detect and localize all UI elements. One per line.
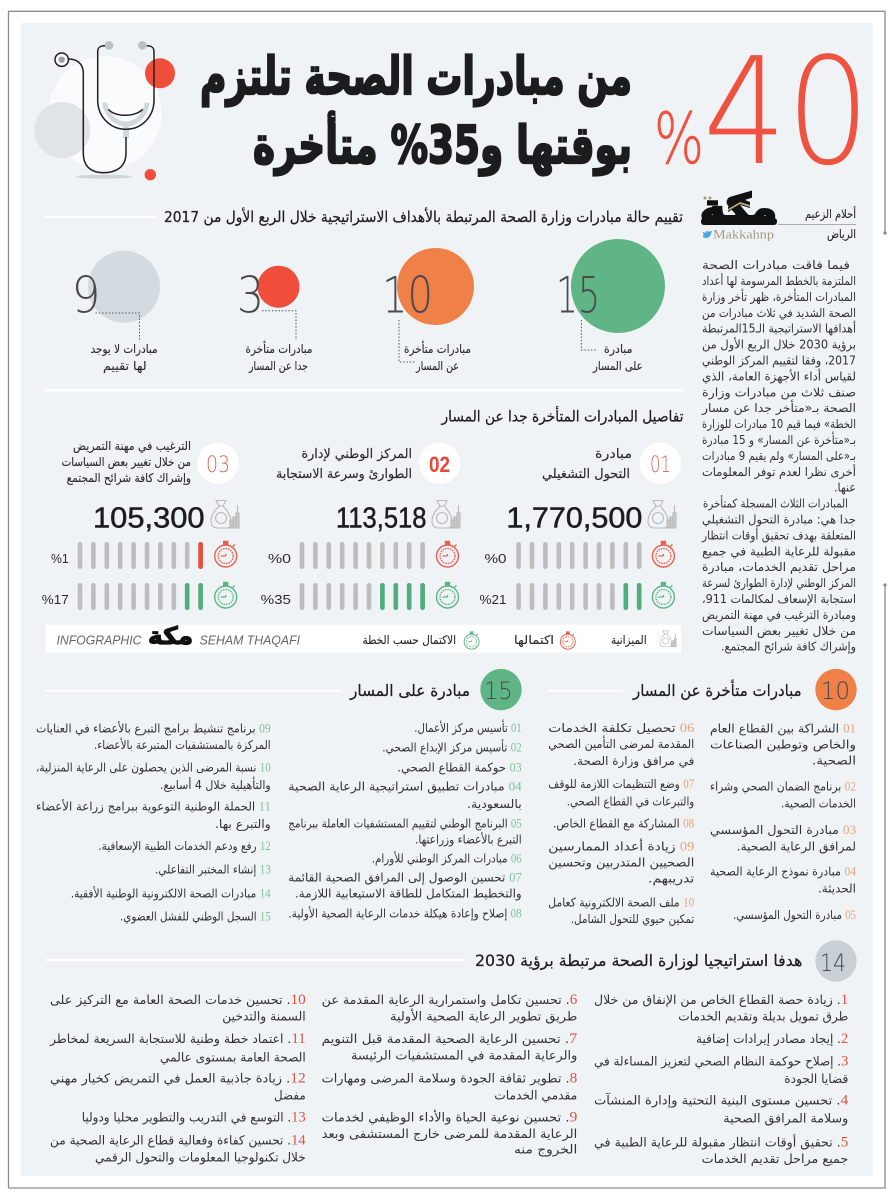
list: on track column 1: 08 إصلاح وإعادة هيكلة خدمات الرعاية الصحية الأولية. xyxy=(288,905,522,921)
initiative 02: 113,518 xyxy=(336,503,426,535)
legend strip xyxy=(46,622,681,653)
section: 14 strategic goals heading: 14 xyxy=(820,949,846,977)
list: on track column 1: 03 حوكمة القطاع الصحي. xyxy=(397,760,522,775)
list: on track column 2: 10 نسبة المرضى الذين يحصلون على الرعاية المنزلية، xyxy=(36,760,271,775)
list: behind schedule column 1: 05 مبادرة التحول المؤسسي. xyxy=(733,908,856,923)
goals column 2: 7. تحسين الرعاية الصحية المقدمة قبل التنويم xyxy=(322,1031,578,1047)
section: 15 on track heading: 15 xyxy=(484,677,513,705)
list: on track column 1: والتخطيط المتكامل للطاقة الاستيعابية اللازمة. xyxy=(295,886,522,901)
goals column 3: مفضل xyxy=(274,1088,306,1103)
newspaper logo: مكة xyxy=(700,186,777,230)
section: 10 behind schedule heading xyxy=(548,669,857,710)
goals column 3: 12. زيادة جاذبية العمل في التمريض كخيار مهني xyxy=(50,1070,306,1086)
byline: أحلام الزعيم xyxy=(805,206,856,222)
article text: صنف ثلاث من مبادرات وزارة xyxy=(702,385,856,400)
initiative 01: التحول التشغيلي xyxy=(542,467,630,482)
goals column 1: 2. إيجاد مصادر إيرادات إضافية xyxy=(696,1031,848,1047)
list: on track column 1: التبرع بالأعضاء وزراعتها. xyxy=(415,831,522,847)
article text: أهدافها الاستراتيجية الـ15المرتبطة xyxy=(702,321,856,337)
list: on track column 1: 07 تحسين الوصول إلى المرافق الصحية القائمة xyxy=(288,870,522,885)
stat: 10 behind: عن المسار xyxy=(415,359,459,374)
article text: الصحة بـ«متأخر جدا عن مسار xyxy=(701,399,856,416)
list: on track column 1: 01 تأسيس مركز الأعمال. xyxy=(414,719,522,736)
goals column 2: والرعاية المقدمة في المستشفيات الرئيسة xyxy=(351,1048,577,1064)
stat: 15 on track xyxy=(556,239,665,374)
stat: 9 not evaluated: 9 xyxy=(72,267,100,325)
stat: 15 on track: على المسار xyxy=(592,359,643,374)
article text: برؤية 2030 خلال الربع الأول من xyxy=(702,337,856,353)
goals column 2: الرعاية المقدمة للمرضى خارج المستشفى وبعد xyxy=(322,1126,577,1142)
section: 14 strategic goals heading: هدفا استراتيجيا لوزارة الصحة مرتبطة برؤية 2030 xyxy=(475,951,802,971)
list: on track column 2: والتأهيلية خلال 4 أسابيع. xyxy=(160,776,271,793)
initiative 03: %17 xyxy=(42,592,69,607)
stat: 10 behind: مبادرات متأخرة xyxy=(404,340,471,357)
goals column 1: طرق تمويل بديلة وتقديم الخدمات xyxy=(678,1009,848,1025)
newspaper logo: Makkahnp xyxy=(713,226,774,242)
list: on track column 2 xyxy=(36,720,271,925)
list: on track column 2: 14 مبادرات الصحة الالكترونية الوطنية الأفقية. xyxy=(71,885,271,901)
article text: المتعلقة بهدف تحقيق أوقات انتظار xyxy=(701,527,856,543)
article text: جدا هي: مبادرة التحول التشغيلي xyxy=(702,512,856,528)
section: 10 behind schedule heading: 10 xyxy=(821,677,850,705)
initiative 01: 1,770,500 xyxy=(506,503,642,535)
list: behind schedule column 1: لمرافق الرعاية الصحية. xyxy=(737,840,856,855)
initiative 02: %35 xyxy=(261,592,291,607)
title: بوقتها و35% متأخرة xyxy=(253,111,632,176)
article text: عنها. xyxy=(834,481,856,495)
article text: من خلال تغيير بعض السياسات xyxy=(702,624,856,639)
stat: 15 on track: 15 xyxy=(556,267,600,325)
goals column 2: الخروج منه xyxy=(514,1141,577,1157)
list: on track column 2: 12 رفع ودعم الخدمات الطبية الإسعافية. xyxy=(98,839,271,854)
section heading: very behind details: تفاصيل المبادرات المتأخرة جدا عن المسار xyxy=(441,406,684,426)
section heading: evaluation: تقييم حالة مبادرات وزارة الصحة المرتبطة بالأهداف الاستراتيجية خلال الربع الأول من 2017 xyxy=(164,207,683,226)
list: on track column 2: والتبرع بها. xyxy=(215,817,271,832)
goals column 1: 1. زيادة حصة القطاع الخاص من الإنفاق من خلال xyxy=(594,992,848,1008)
list: behind schedule column 2: 10 ملف الصحة الالكترونية كعامل xyxy=(548,896,694,911)
stat: 9 not evaluated xyxy=(72,251,160,373)
initiative 01: 01 xyxy=(650,453,671,478)
list: on track column 1 xyxy=(288,719,522,921)
initiative 02: 02 xyxy=(429,452,450,477)
article text: المبادرات المتأخرة، ظهر تأخر وزارة xyxy=(702,288,856,305)
goals column 2: مقدمي الخدمات xyxy=(494,1088,577,1103)
byline xyxy=(778,206,856,242)
stat: 3 very behind xyxy=(237,266,312,374)
list: behind schedule column 1: 01 الشراكة بين القطاع العام xyxy=(710,721,856,736)
article text: استجابة الإسعاف لمكالمات 911، xyxy=(702,592,856,606)
initiative 01: مبادرة xyxy=(595,447,632,462)
list: behind schedule column 1: 04 مبادرة نموذج الرعاية الصحية xyxy=(710,865,857,880)
initiative 01 xyxy=(480,443,681,610)
goals column 1: 4. تحسين مستوى البنية التحتية وإدارة المنشآت xyxy=(594,1093,849,1109)
list: behind schedule column 2: 09 زيادة أعداد الممارسين xyxy=(548,839,694,855)
goals column 2: 9. تحسين نوعية الحياة والأداء الوظيفي لخدمات xyxy=(322,1110,577,1126)
article text: المركز الوطني لإدارة الطوارئ لسرعة xyxy=(702,576,856,591)
stat: 15 on track: مبادرة xyxy=(604,342,632,357)
big number 40: 40 xyxy=(703,26,870,198)
stat: 3 very behind: مبادرات متأخرة xyxy=(246,340,312,357)
goals column 3: 10. تحسين خدمات الصحة العامة مع التركيز على xyxy=(50,992,306,1008)
section: 10 behind schedule heading: مبادرات متأخرة عن المسار xyxy=(632,679,802,701)
article text xyxy=(701,258,856,655)
list: on track column 1: 05 البرنامج الوطني لتقييم المستشفيات العاملة ببرنامج xyxy=(288,816,522,831)
goals column 1: 5. تحقيق أوقات انتظار مقبولة للرعاية الطبية في xyxy=(594,1133,848,1150)
list: on track column 1: بالسعودية. xyxy=(467,797,522,812)
list: behind schedule column 1: الخدمات الصحية. xyxy=(781,796,856,810)
initiative 02: المركز الوطني لإدارة xyxy=(302,447,412,462)
list: behind schedule column 2: المقدمة لمرضى التأمين الصحي xyxy=(548,735,694,752)
stat: 9 not evaluated: لها تقييم xyxy=(103,359,147,373)
initiative 01: %0 xyxy=(484,551,506,566)
title: من مبادرات الصحة تلتزم xyxy=(200,47,632,107)
goals column 3: 13. التوسع في التدريب والتطوير محليا ودوليا xyxy=(82,1110,306,1126)
legend strip: INFOGRAPHIC xyxy=(56,634,142,648)
goals column 3: 11. اعتماد خطة وطنية للاستجابة السريعة لمخاطر xyxy=(49,1031,306,1047)
goals column 3 xyxy=(49,992,306,1166)
section: 15 on track heading xyxy=(45,669,522,710)
goals column 3: الصحة العامة بمستوى عالمي xyxy=(160,1050,306,1066)
list: behind schedule column 2 xyxy=(548,721,694,927)
list: behind schedule column 2: والتبرعات في القطاع الصحي. xyxy=(567,795,694,810)
article text: بـ«متأخرة عن المسار» و 15 مبادرة xyxy=(702,431,856,448)
list: behind schedule column 1: 03 مبادرة التحول المؤسسي xyxy=(710,823,856,838)
stat: 9 not evaluated: مبادرات لا يوجد xyxy=(91,342,158,357)
stat: 10 behind: 10 xyxy=(382,267,433,325)
initiative 01: %21 xyxy=(480,592,506,607)
initiative 03: وإشراك كافة شرائح المجتمع xyxy=(67,471,191,486)
article text: بـ«على المسار» ولم يقيم 9 مبادرات xyxy=(702,449,856,464)
goals column 1: قضايا الجودة xyxy=(784,1071,848,1087)
byline: الرياض xyxy=(827,227,856,242)
list: on track column 2: 15 السجل الوطني للفشل العضوي. xyxy=(120,910,271,925)
list: behind schedule column 2: 08 المشاركة مع القطاع الخاص. xyxy=(553,816,694,831)
goals column 1: 3. إصلاح حوكمة النظام الصحي لتعزيز المساءلة في xyxy=(594,1054,848,1070)
list: behind schedule column 2: تمكين حيوي للتحول الشامل. xyxy=(571,912,694,927)
goals column 2: 6. تحسين تكامل واستمرارية الرعاية المقدمة عن xyxy=(322,992,578,1008)
initiative 03: 105,300 xyxy=(93,503,205,535)
list: behind schedule column 2: تدريبهم. xyxy=(648,871,694,886)
legend strip: SEHAM THAQAFI xyxy=(200,634,301,648)
goals column 2 xyxy=(322,992,578,1157)
article text: الخطة» فيما قيم 10 مبادرات للوزارة xyxy=(702,417,856,432)
goals column 2: طريق تطوير الرعاية الصحية الأولية xyxy=(390,1009,577,1025)
list: behind schedule column 1: الحديثة. xyxy=(818,881,856,895)
article text: فيما فاقت مبادرات الصحة xyxy=(702,258,850,273)
legend strip: مكة xyxy=(148,622,193,650)
percent sign: % xyxy=(654,98,704,180)
list: behind schedule column 1 xyxy=(710,721,857,923)
initiative 03: الترغيب في مهنة التمريض xyxy=(73,439,191,454)
list: behind schedule column 1: 02 برنامج الضمان الصحي وشراء xyxy=(710,780,856,795)
list: behind schedule column 2: 06 تحصيل تكلفة الخدمات xyxy=(548,721,694,735)
goals column 3: 14. تحسين كفاءة وفعالية قطاع الرعاية الصحية من xyxy=(50,1133,306,1149)
list: behind schedule column 2: 07 وضع التنظيمات اللازمة للوقف xyxy=(548,777,694,792)
goals column 3: السمنة والتدخين xyxy=(222,1009,306,1025)
article text: مقبولة للرعاية الطبية في جميع xyxy=(702,544,856,559)
initiative 03: 03 xyxy=(206,453,230,478)
list: on track column 2: 09 برنامج تنشيط برامج التبرع بالأعضاء في العنايات xyxy=(36,720,271,736)
legend strip: الاكتمال حسب الخطة xyxy=(362,633,456,647)
list: on track column 2: 11 الحملة الوطنية التوعوية ببرامج زراعة الأعضاء xyxy=(36,799,271,815)
stat: 3 very behind: 3 xyxy=(237,267,264,325)
section: 15 on track heading: مبادرة على المسار xyxy=(349,681,470,701)
list: behind schedule column 1: الصحية. xyxy=(812,754,856,768)
initiative 03 xyxy=(42,439,239,610)
article text: وإشراك كافة شرائح المجتمع. xyxy=(721,640,856,655)
list: behind schedule column 2: الصحيين المتدربين وتحسين xyxy=(548,855,694,870)
goals column 1: جميع مراحل تقديم الخدمات xyxy=(702,1151,848,1167)
initiative 02: الطوارئ وسرعة الاستجابة xyxy=(276,467,412,482)
list: on track column 1: 04 مبادرات تطبيق استراتيجية الرعاية الصحية xyxy=(288,780,522,795)
legend strip: اكتمالها xyxy=(514,633,554,647)
article text: ومبادرة الترغيب في مهنة التمريض xyxy=(702,608,856,623)
icon: stethoscope xyxy=(34,41,175,180)
initiative 02: %0 xyxy=(268,551,291,566)
stat: 10 behind xyxy=(382,248,474,374)
article text: مراحل تقديم الخدمات، مبادرة xyxy=(702,560,856,575)
section: 14 strategic goals heading xyxy=(45,940,857,982)
list: behind schedule column 2: في مرافق وزارة الصحة. xyxy=(573,754,694,769)
list: behind schedule column 1: والخاص وتوطين الصناعات xyxy=(710,737,856,752)
goals column 2: 8. تطوير ثقافة الجودة وسلامة المرضى ومهارات xyxy=(322,1070,577,1086)
article text: 2017، وفقا لتقييم المركز الوطني xyxy=(702,354,856,368)
article text: لقياس أداء الأجهزة العامة، الذي xyxy=(702,368,856,384)
goals column 1 xyxy=(594,992,849,1167)
list: on track column 2: المركزة بالمستشفيات المتبرعة بالأعضاء. xyxy=(94,737,271,753)
initiative 02 xyxy=(261,443,460,610)
list: on track column 1: 06 مبادرات المركز الوطني للأورام. xyxy=(372,850,522,866)
title xyxy=(200,47,632,176)
goals column 1: وسلامة المرافق الصحية xyxy=(723,1110,848,1126)
initiative 03: من خلال تغيير بعض السياسات xyxy=(62,455,191,470)
list: on track column 2: 13 إنشاء المختبر التفاعلي. xyxy=(155,862,271,877)
article text: الملتزمة بالخطط المرسومة لها أعداد xyxy=(702,273,856,289)
stat: 3 very behind: جدا عن المسار xyxy=(248,359,308,374)
goals column 3: خلال تكنولوجيا المعلومات والتحول الرقمي xyxy=(95,1150,306,1166)
initiative 03: %1 xyxy=(51,551,69,566)
article text: الصحة الشديد في ثلاث مبادرات من xyxy=(702,306,856,321)
article text: أخرى نظرا لعدم توفر المعلومات xyxy=(702,464,856,480)
list: on track column 1: 02 تأسيس مركز الإبداع الصحي. xyxy=(382,738,522,755)
article text: المبادرات الثلاث المسجلة كمتأخرة xyxy=(703,495,848,512)
legend strip: الميزانية xyxy=(611,633,647,648)
